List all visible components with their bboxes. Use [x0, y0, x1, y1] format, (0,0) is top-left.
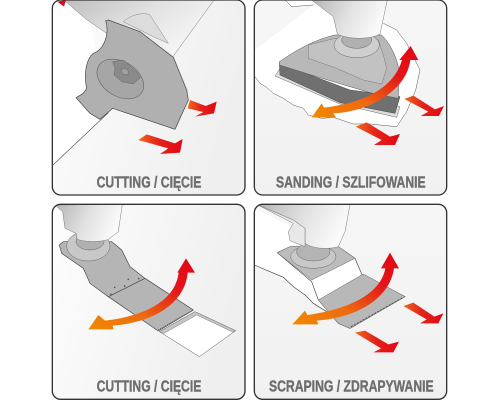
scraper blade	[277, 247, 405, 328]
tool body	[312, 0, 387, 38]
tool collar	[67, 231, 110, 261]
workpiece edge	[52, 0, 108, 166]
pad raised plate	[308, 38, 387, 84]
sanding pad side	[279, 63, 400, 113]
panel: cutting with plunge blade	[52, 204, 245, 399]
arrow: double oscillation	[292, 253, 399, 324]
arrow: feed direction lower	[138, 134, 183, 154]
arrow: lower	[356, 122, 400, 145]
blade rivets	[110, 278, 139, 295]
sanding pad top	[279, 35, 399, 98]
oscillating tool body	[64, 0, 214, 58]
label: scraping: SCRAPING / ZDRAPYWANIE	[269, 379, 434, 396]
arrow: double oscillation	[88, 258, 195, 329]
sanded surface	[255, 0, 420, 127]
red mark on tool	[57, 0, 66, 7]
saw blade disc	[76, 20, 188, 129]
blade mounting recess	[96, 58, 144, 100]
workpiece cut	[159, 312, 236, 357]
arrow: right	[403, 303, 443, 323]
tool body	[55, 204, 122, 241]
blade hub	[113, 60, 141, 84]
panel: cutting with round blade	[52, 0, 245, 195]
label: cutting: CUTTING / CIĘCIE	[97, 379, 202, 396]
arrow: lower	[355, 331, 399, 352]
sandpaper sheet	[275, 68, 400, 117]
label: sanding: SANDING / SZLIFOWANIE	[276, 174, 426, 191]
arrow: double oscillation	[312, 46, 418, 117]
tool body	[257, 204, 350, 248]
arrow: right	[404, 96, 444, 116]
panel: sanding	[254, 0, 447, 195]
panel: scraping	[254, 204, 447, 399]
arrow: feed direction right	[188, 100, 217, 117]
label: cutting: CUTTING / CIĘCIE	[97, 174, 202, 191]
tool collar	[123, 14, 168, 43]
tool collar	[291, 242, 336, 268]
scraped surface	[255, 210, 327, 311]
tool collar	[334, 36, 380, 58]
plunge blade	[59, 242, 193, 331]
